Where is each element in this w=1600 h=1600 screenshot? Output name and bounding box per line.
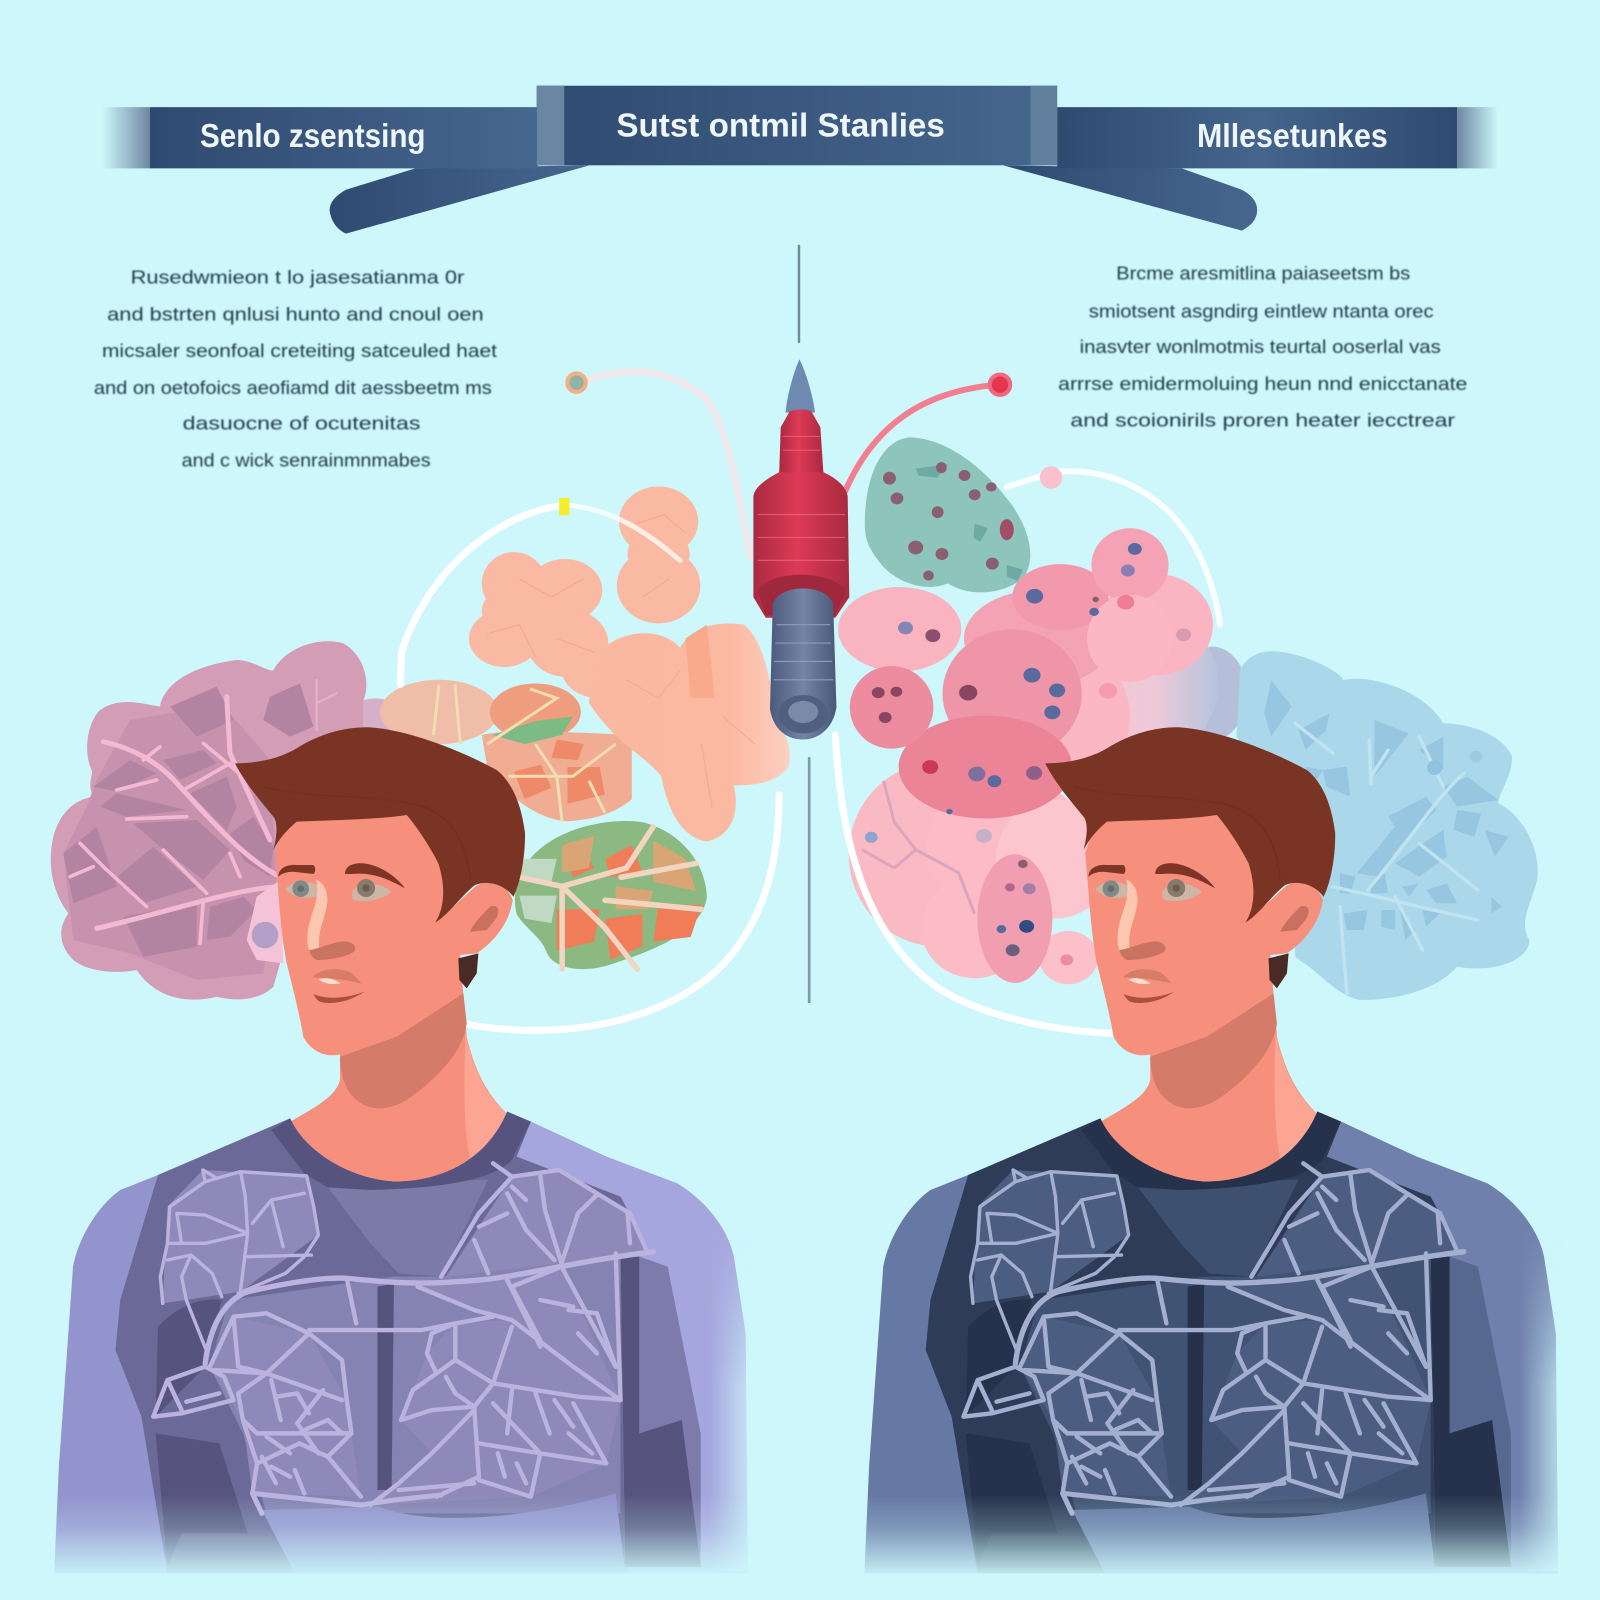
centre ribbon [537, 86, 1057, 165]
leaf cloud: right blue [1178, 647, 1538, 1000]
heading: right: Mllesetunkes [1197, 118, 1388, 155]
right ribbon tail [1003, 165, 1257, 231]
right sleeve [517, 1122, 748, 1573]
text block: left: micsaler seonfoal creteiting satceuled haet [102, 340, 497, 361]
text block: left: and c wick senrainmnmabes [182, 449, 431, 470]
right top arc [1007, 471, 1220, 625]
person: left torso [54, 1112, 748, 1573]
main mosaic leaf [515, 821, 707, 969]
node: pink [1040, 466, 1062, 489]
peach lobes [469, 486, 790, 841]
right body panel [639, 1257, 701, 1567]
person: right head [1045, 727, 1347, 1193]
left lower arc [466, 795, 779, 1030]
ear shadow [470, 906, 498, 932]
eyes [285, 882, 392, 901]
lattice leaf fill [163, 1170, 646, 1505]
lattice [153, 1163, 654, 1513]
left top connector [586, 372, 750, 556]
centre divider top [798, 245, 800, 343]
face [275, 800, 513, 1055]
text block: left: Rusedwmieon t lo jasesatianma 0r [131, 267, 464, 288]
text block: right: smiotsent asgndirg eintlew ntanta orec [1089, 300, 1434, 321]
mosaic leaves [380, 680, 632, 822]
person: right torso [864, 1112, 1558, 1573]
left shadow patches [156, 1299, 248, 1567]
shirt bottom fade [0, 1495, 1600, 1592]
lower pale lobes [849, 762, 1114, 984]
red collar [758, 575, 846, 616]
neck shadow [340, 993, 467, 1108]
text block: left: dasuocne of ocutenitas [183, 413, 420, 434]
red connector [845, 385, 1000, 492]
pink lung [838, 437, 1218, 984]
nose [307, 879, 327, 951]
left ribbon [102, 107, 538, 168]
left arc extension [570, 505, 680, 560]
banner: section headings [102, 86, 1498, 234]
left ribbon tail [330, 165, 590, 234]
shirt base [54, 1112, 748, 1573]
nape hair [458, 953, 478, 988]
chest panel [328, 1179, 488, 1277]
collar [271, 1112, 531, 1190]
hair [235, 727, 525, 923]
right ribbon [1057, 107, 1498, 168]
leaf cloud: left pink [51, 641, 407, 1000]
text block: right: Brcme aresmitlina paiaseetsm bs [1116, 263, 1410, 284]
lung dots [865, 543, 1191, 965]
lung outline arcs [400, 372, 1220, 1033]
rocket-shaped instrument [753, 359, 849, 739]
red body [753, 472, 849, 618]
heading: left: Senlo zsentsing [200, 118, 426, 155]
text block: left: and on oetofoics aeofiamd dit aessbeetm ms [94, 377, 492, 398]
text block: right: inasvter wonlmotmis teurtal ooserlal vas [1080, 336, 1441, 357]
red neck [779, 409, 824, 475]
teal lobe [865, 437, 1030, 592]
heading: centre: Sutst ontmil Stanlies [616, 108, 945, 145]
text block: right: arrrse emidermoluing heun nnd enicctanate [1058, 373, 1467, 394]
left arc [400, 505, 565, 684]
centre stripe [377, 1283, 394, 1490]
connector nodes [559, 373, 1062, 515]
right lower arc [835, 735, 1114, 1033]
dark body [116, 1112, 649, 1573]
node: red [990, 374, 1010, 395]
text block: left: and bstrten qnlusi hunto and cnoul oen [107, 303, 484, 324]
barrel end [779, 695, 828, 734]
lower belly [262, 1493, 625, 1573]
main pink lobes [838, 528, 1218, 818]
neck [283, 953, 537, 1193]
peach lung [380, 486, 790, 969]
sleeve edge fades [709, 1224, 1562, 1571]
lobe veins [487, 514, 755, 808]
node: orange [567, 373, 586, 392]
node: yellow [559, 498, 569, 515]
mouth [313, 969, 362, 983]
text block: left [94, 267, 497, 470]
brows [278, 863, 405, 888]
centre divider bottom [808, 757, 810, 1003]
person: left head [235, 727, 537, 1193]
lower chest [210, 1257, 620, 1513]
grey barrel [770, 589, 836, 739]
neck highlight [464, 1033, 520, 1187]
text block: right [1058, 263, 1467, 431]
right body shadow [620, 1257, 701, 1567]
tip [786, 359, 815, 413]
text block: right: and scoionirils proren heater iecctrear [1070, 410, 1455, 431]
